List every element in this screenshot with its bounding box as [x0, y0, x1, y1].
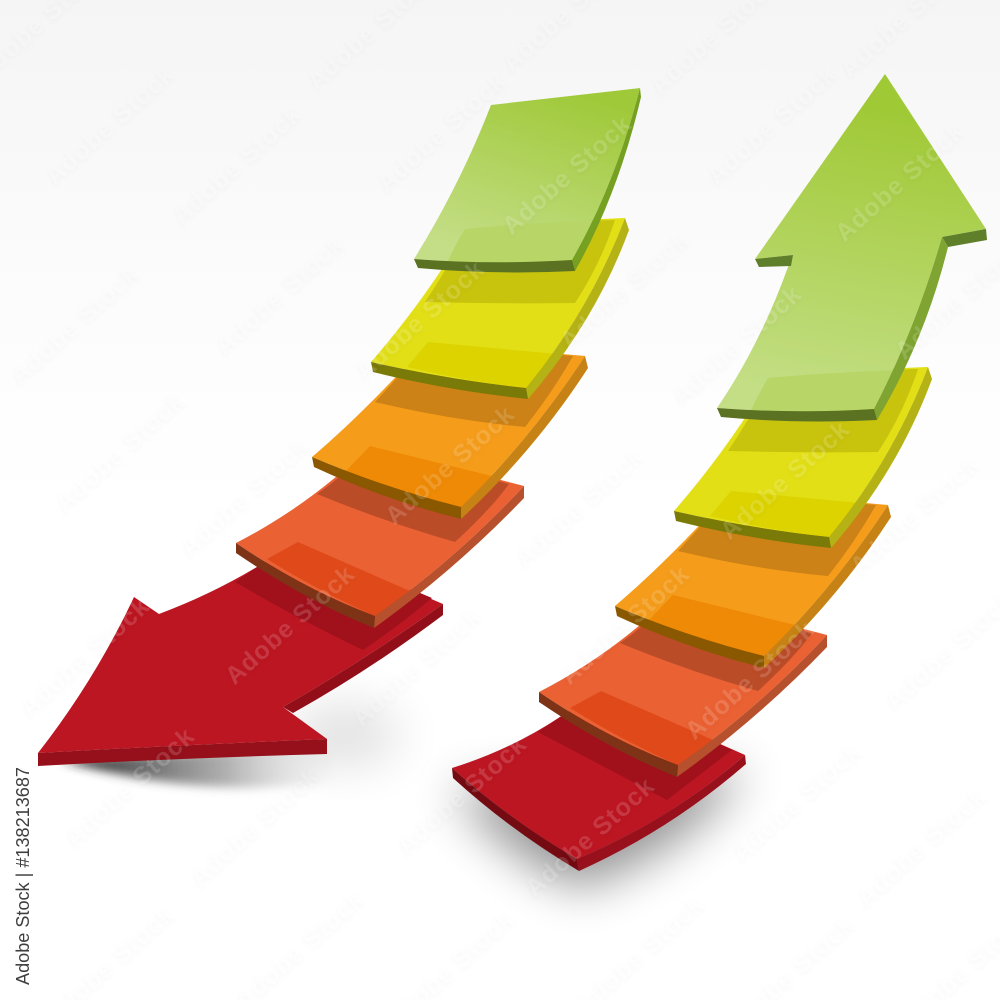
right red base step [452, 691, 746, 871]
watermark pattern: Adobe Stock [667, 280, 807, 410]
right arrow: pointing up [452, 74, 987, 871]
watermark pattern: Adobe Stock [852, 782, 992, 912]
right orange step [615, 491, 891, 668]
watermark pattern: Adobe Stock [5, 260, 145, 390]
watermark pattern: Adobe Stock [210, 230, 350, 360]
left yellow step [371, 218, 629, 399]
left orange step [312, 342, 588, 519]
watermark pattern: Adobe Stock [702, 60, 842, 190]
left arrow: pointing down [38, 88, 641, 766]
watermark pattern: Adobe Stock [372, 67, 512, 197]
watermark pattern: Adobe Stock [830, 117, 970, 247]
watermark pattern: Adobe Stock [350, 255, 490, 385]
watermark pattern: Adobe Stock [845, 450, 985, 580]
watermark pattern: Adobe Stock [15, 592, 155, 722]
left red arrowhead [38, 542, 443, 766]
watermark pattern: Adobe Stock [715, 415, 855, 545]
watermark pattern: Adobe Stock [220, 560, 360, 690]
watermark pattern: Adobe Stock [40, 60, 180, 190]
watermark pattern: Adobe Stock [185, 762, 325, 892]
right yellow step [674, 367, 932, 548]
watermark pattern: Adobe Stock [680, 615, 820, 745]
stock id caption: Adobe Stock | #138213687 [13, 767, 33, 985]
watermark pattern: Adobe Stock [175, 432, 315, 562]
watermark pattern: Adobe Stock [727, 737, 867, 867]
right red-orange step [539, 595, 827, 777]
watermark pattern: Adobe Stock [520, 772, 660, 902]
left red-orange step [236, 446, 524, 628]
watermark pattern: Adobe Stock [392, 730, 532, 860]
watermark pattern: Adobe Stock [50, 387, 190, 517]
watermark pattern: Adobe Stock [380, 400, 520, 530]
watermark pattern: Adobe Stock [347, 602, 487, 732]
right green arrowhead [717, 74, 987, 421]
watermark pattern: Adobe Stock [510, 442, 650, 572]
watermark pattern: Adobe Stock [60, 722, 200, 852]
soft ground shadows [60, 705, 745, 888]
watermark pattern: Adobe Stock [555, 225, 695, 355]
watermark pattern: Adobe Stock [497, 110, 637, 240]
watermark pattern: Adobe Stock [167, 100, 307, 230]
watermark pattern: Adobe Stock [555, 560, 695, 690]
left green step [414, 88, 641, 272]
